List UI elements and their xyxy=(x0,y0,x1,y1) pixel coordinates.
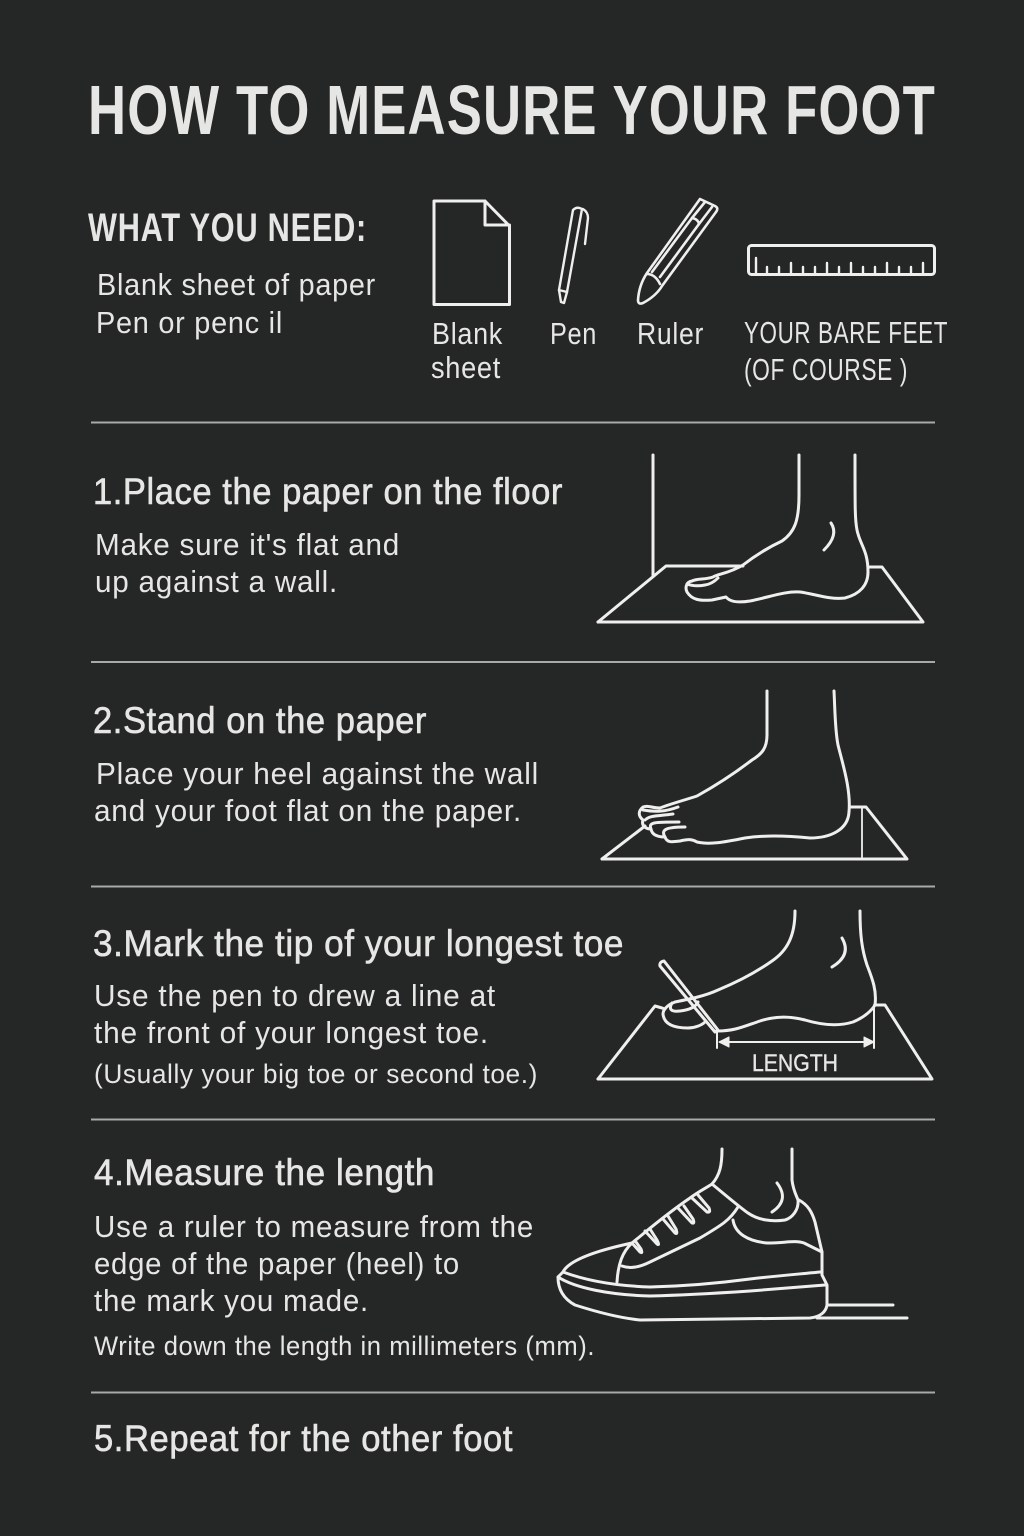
text block: supplies list: Pen or penc il xyxy=(96,305,283,340)
label: blank sheet: sheet xyxy=(431,350,501,385)
label: your bare feet xyxy=(744,315,948,387)
panel: step 3 xyxy=(93,911,932,1089)
icon: ruler xyxy=(748,246,934,274)
panel: step 2 xyxy=(93,691,907,859)
icon: blank sheet xyxy=(434,201,510,304)
label: your bare feet: (OF COURSE ) xyxy=(744,352,908,387)
label: blank sheet xyxy=(431,316,503,385)
heading: what you need: WHAT YOU NEED: xyxy=(88,206,367,250)
text block: step 4 description: Write down the length in millimeters (mm). xyxy=(94,1331,595,1361)
text block: step 3 description: the front of your longest toe. xyxy=(94,1015,489,1050)
text block: step 1 description xyxy=(95,527,400,599)
text block: step 2 description: and your foot flat on the paper. xyxy=(94,793,522,828)
heading: step 3: 3.Mark the tip of your longest toe xyxy=(93,923,624,964)
text block: supplies list xyxy=(96,267,376,340)
label: your bare feet: YOUR BARE FEET xyxy=(744,315,948,350)
text block: step 4 description: the mark you made. xyxy=(94,1283,369,1318)
panel: what you need xyxy=(88,199,948,387)
illustration: marking the longest toe xyxy=(598,911,932,1079)
text block: step 4 description: Use a ruler to measure from the xyxy=(94,1209,534,1244)
label: blank sheet: Blank xyxy=(432,316,503,351)
text block: step 3 description xyxy=(94,978,538,1089)
panel: step 1 xyxy=(93,455,923,622)
text block: step 1 description: up against a wall. xyxy=(95,564,338,599)
heading: step 4: 4.Measure the length xyxy=(94,1152,435,1193)
label: ruler: Ruler xyxy=(637,316,704,351)
heading: step 1: 1.Place the paper on the floor xyxy=(93,471,563,512)
text block: step 4 description: edge of the paper (heel) to xyxy=(94,1246,460,1281)
heading: step 5: 5.Repeat for the other foot xyxy=(94,1418,513,1459)
heading: step 2: 2.Stand on the paper xyxy=(93,700,427,741)
illustration: foot on paper against wall xyxy=(598,455,923,622)
illustration: foot in shoe xyxy=(558,1149,907,1320)
text block: step 2 description: Place your heel against the wall xyxy=(96,756,539,791)
label: length: LENGTH xyxy=(752,1050,838,1077)
text block: step 1 description: Make sure it's flat and xyxy=(95,527,400,562)
text block: step 4 description xyxy=(94,1209,595,1361)
text block: step 2 description xyxy=(94,756,539,828)
panel: step 4 xyxy=(94,1149,907,1361)
text block: supplies list: Blank sheet of paper xyxy=(97,267,376,302)
label: pen: Pen xyxy=(550,316,597,351)
text block: step 3 description: (Usually your big toe or second toe.) xyxy=(94,1059,538,1089)
icon: pencil xyxy=(638,199,717,304)
text block: step 3 description: Use the pen to drew a line at xyxy=(94,978,496,1013)
icon: pen xyxy=(559,208,588,303)
illustration: foot flat on paper xyxy=(602,691,907,859)
